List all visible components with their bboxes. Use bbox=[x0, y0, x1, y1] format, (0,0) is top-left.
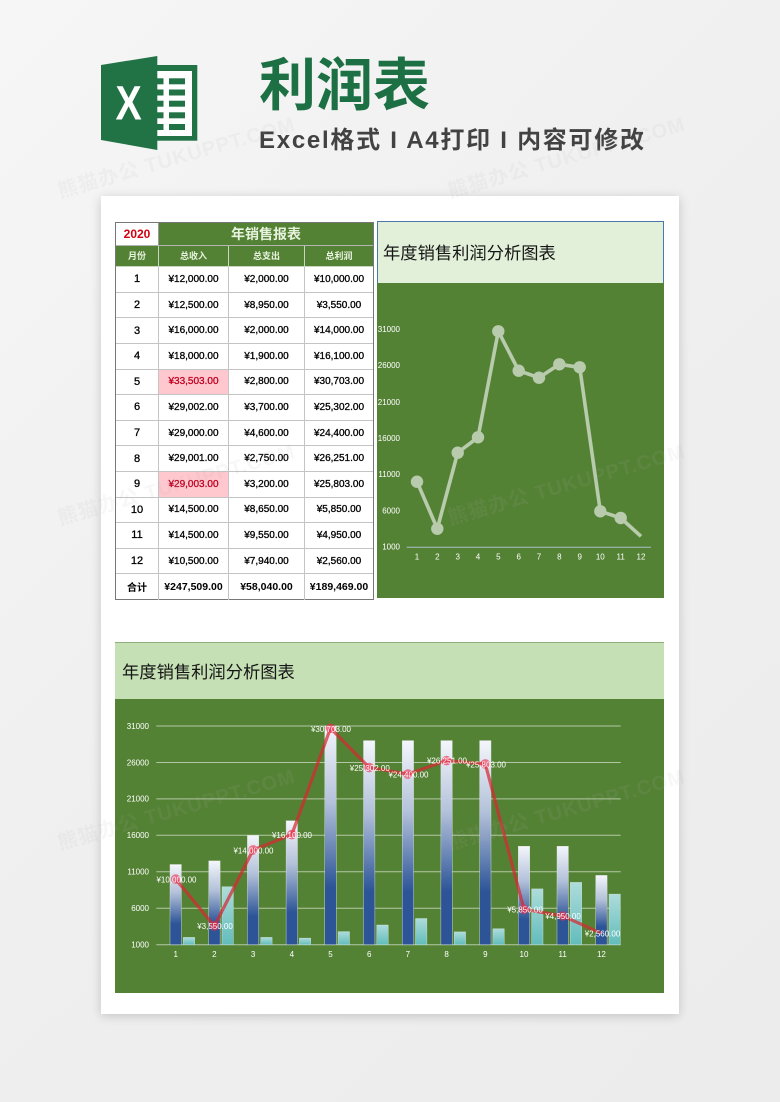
x axis labels: 8 bbox=[444, 950, 449, 959]
row: month 3 bbox=[116, 318, 373, 344]
row: month 3: 3 bbox=[134, 325, 140, 337]
row: month 9: ¥25,803.00 bbox=[314, 479, 364, 490]
row: month 10: ¥5,850.00 bbox=[317, 504, 361, 515]
watermarks: 熊猫办公 TUKUPPT.COM bbox=[55, 112, 298, 203]
x axis labels: 11 bbox=[617, 552, 625, 562]
y axis labels: 16000 bbox=[378, 434, 401, 443]
y axis labels bbox=[378, 325, 401, 552]
data labels: ¥2,560.00 bbox=[584, 930, 621, 938]
row: month 1 bbox=[116, 267, 373, 293]
x axis labels: 9 bbox=[483, 950, 488, 959]
row: month 7: 7 bbox=[134, 427, 140, 439]
x axis labels: 9 bbox=[577, 552, 582, 562]
data labels: ¥14,000.00 bbox=[232, 846, 274, 856]
x axis labels: 5 bbox=[328, 950, 333, 959]
y axis labels: 11000 bbox=[127, 868, 150, 876]
row: month 11: ¥4,950.00 bbox=[317, 530, 361, 541]
row: month 9: ¥29,003.00 bbox=[168, 479, 219, 490]
row: month 6: 6 bbox=[134, 401, 140, 413]
row: month 12: ¥10,500.00 bbox=[168, 556, 219, 567]
watermarks: 熊猫办公 TUKUPPT.COM bbox=[445, 112, 688, 203]
x axis labels: 2 bbox=[435, 552, 440, 562]
row: month 4 bbox=[116, 344, 373, 370]
x axis labels: 12 bbox=[637, 552, 646, 562]
row: month 7: ¥24,400.00 bbox=[314, 428, 364, 439]
x axis labels: 10 bbox=[520, 950, 529, 959]
row: totals: ¥189,469.00 bbox=[310, 581, 368, 593]
row: month 12 bbox=[116, 549, 373, 574]
x axis labels: 10 bbox=[596, 552, 605, 562]
table: annual sales report bbox=[115, 222, 374, 600]
x axis labels: 6 bbox=[516, 552, 521, 562]
row: month 11: ¥9,550.00 bbox=[244, 530, 289, 541]
row: month 8: ¥2,750.00 bbox=[244, 453, 289, 464]
row: month 8: 8 bbox=[134, 453, 140, 465]
y axis labels: 6000 bbox=[131, 904, 150, 913]
x axis labels: 12 bbox=[597, 950, 606, 959]
row: month 10: ¥14,500.00 bbox=[168, 504, 219, 515]
chart: lower combined bar and line chart bbox=[115, 699, 664, 993]
icon: Excel logo bbox=[101, 56, 197, 150]
panel: upper chart title: 年度销售利润分析图表 bbox=[383, 243, 556, 263]
row: month 1: ¥2,000.00 bbox=[244, 274, 289, 285]
title: 利润表 bbox=[259, 54, 430, 118]
row: month 10 bbox=[116, 498, 373, 523]
data labels: ¥26,251.00 bbox=[426, 756, 468, 766]
row: totals: ¥247,509.00 bbox=[164, 581, 223, 593]
row: month 4: ¥1,900.00 bbox=[244, 351, 289, 362]
data labels: ¥25,803.00 bbox=[465, 760, 507, 769]
row: month 12: ¥2,560.00 bbox=[317, 556, 361, 567]
row: month 1: ¥10,000.00 bbox=[314, 274, 364, 285]
x axis labels: 7 bbox=[537, 552, 542, 562]
row: month 2: 2 bbox=[134, 299, 140, 311]
row: month 3: ¥14,000.00 bbox=[314, 325, 364, 336]
y axis labels: 26000 bbox=[127, 758, 150, 767]
table header row: 总支出 bbox=[253, 251, 280, 261]
y axis labels: 21000 bbox=[378, 398, 401, 407]
row: month 5: ¥33,503.00 bbox=[168, 376, 219, 387]
row: month 9: 9 bbox=[134, 478, 140, 490]
row: month 10: ¥8,650.00 bbox=[244, 504, 289, 515]
y axis labels bbox=[127, 722, 150, 950]
y axis labels: 1000 bbox=[382, 542, 401, 552]
y axis labels: 1000 bbox=[131, 940, 150, 950]
row: month 3: ¥2,000.00 bbox=[244, 325, 289, 336]
data labels: ¥4,950.00 bbox=[544, 912, 581, 921]
row: month 9: ¥3,200.00 bbox=[244, 479, 289, 490]
chart: upper profit line chart bbox=[377, 283, 664, 598]
row: month 2: ¥8,950.00 bbox=[244, 300, 289, 311]
row: month 5: ¥30,703.00 bbox=[314, 376, 364, 387]
y axis labels: 6000 bbox=[382, 506, 401, 516]
x axis labels: 6 bbox=[367, 950, 372, 959]
row: month 4: 4 bbox=[134, 350, 140, 362]
table title row: 年销售报表 bbox=[231, 226, 301, 242]
y axis labels: 21000 bbox=[127, 795, 150, 804]
data labels bbox=[155, 725, 621, 938]
row: month 11 bbox=[116, 523, 373, 549]
row: month 12: 12 bbox=[131, 555, 143, 567]
row: month 6: ¥25,302.00 bbox=[314, 402, 364, 413]
table header row: 总利润 bbox=[325, 251, 352, 261]
table header row bbox=[116, 246, 373, 267]
x axis labels: 7 bbox=[406, 950, 411, 959]
icon: Excel logo: X bbox=[116, 77, 142, 130]
bars: total expense bbox=[183, 882, 620, 945]
row: month 10: 10 bbox=[131, 504, 143, 516]
table header row: 月份 bbox=[128, 251, 146, 261]
y axis labels: 31000 bbox=[127, 722, 150, 731]
row: month 1: ¥12,000.00 bbox=[168, 274, 219, 285]
panel: white document card bbox=[101, 196, 679, 1014]
row: month 3: ¥16,000.00 bbox=[168, 325, 219, 336]
y axis labels: 31000 bbox=[378, 325, 401, 334]
row: month 9 bbox=[116, 472, 373, 498]
subtitle: Excel格式 I A4打印 I 内容可修改 bbox=[259, 127, 644, 154]
row: month 5 bbox=[116, 370, 373, 395]
line series: total profit bbox=[171, 723, 601, 933]
data labels: ¥24,400.00 bbox=[387, 770, 429, 779]
data labels: ¥3,550.00 bbox=[196, 922, 233, 931]
panel: lower chart title: 年度销售利润分析图表 bbox=[122, 662, 295, 682]
row: month 11: 11 bbox=[131, 529, 143, 541]
y axis labels: 16000 bbox=[127, 831, 150, 840]
row: month 4: ¥16,100.00 bbox=[314, 351, 364, 362]
x axis labels: 3 bbox=[455, 552, 460, 562]
x axis labels: 1 bbox=[415, 552, 420, 562]
row: month 8 bbox=[116, 446, 373, 472]
row: month 7: ¥4,600.00 bbox=[244, 428, 289, 439]
data labels: ¥16,100.00 bbox=[271, 831, 313, 840]
data labels: ¥5,850.00 bbox=[506, 905, 543, 914]
row: month 11: ¥14,500.00 bbox=[168, 530, 219, 541]
watermarks: 熊猫办公 TUKUPPT.COM bbox=[55, 764, 298, 855]
bars: total income bbox=[170, 726, 607, 945]
line series: profit bbox=[411, 325, 641, 536]
x axis labels: 3 bbox=[251, 950, 256, 959]
row: month 8: ¥26,251.00 bbox=[314, 453, 364, 464]
row: month 6: ¥3,700.00 bbox=[244, 402, 289, 413]
row: month 2: ¥3,550.00 bbox=[317, 300, 361, 311]
row: month 7 bbox=[116, 421, 373, 446]
x axis labels: 4 bbox=[476, 552, 481, 562]
row: month 4: ¥18,000.00 bbox=[168, 351, 219, 362]
row: month 8: ¥29,001.00 bbox=[168, 453, 219, 464]
row: month 2: ¥12,500.00 bbox=[168, 300, 219, 311]
table title row: 2020 bbox=[124, 227, 150, 241]
row: month 2 bbox=[116, 293, 373, 318]
x axis labels: 4 bbox=[290, 950, 295, 959]
header: logo, title and subtitle bbox=[101, 54, 644, 154]
row: month 1: 1 bbox=[134, 273, 140, 285]
row: month 7: ¥29,000.00 bbox=[168, 428, 219, 439]
data labels: ¥10,000.00 bbox=[155, 876, 197, 884]
row: totals: 合计 bbox=[127, 583, 147, 594]
x axis labels bbox=[415, 552, 646, 562]
watermarks: 熊猫办公 TUKUPPT.COM bbox=[55, 439, 298, 530]
row: totals bbox=[127, 574, 368, 600]
x axis labels bbox=[173, 950, 606, 959]
y axis labels: 11000 bbox=[378, 470, 401, 479]
x axis labels: 5 bbox=[496, 552, 501, 562]
x axis labels: 1 bbox=[173, 950, 178, 959]
row: totals: ¥58,040.00 bbox=[240, 581, 293, 593]
data labels: ¥30,703.00 bbox=[310, 725, 352, 734]
table title row bbox=[116, 223, 373, 246]
x axis labels: 2 bbox=[212, 950, 217, 959]
x axis labels: 8 bbox=[557, 552, 562, 562]
row: month 6 bbox=[116, 395, 373, 421]
row: month 5: 5 bbox=[134, 376, 140, 388]
y axis labels: 26000 bbox=[378, 361, 401, 370]
row: month 5: ¥2,800.00 bbox=[244, 376, 289, 387]
row: month 6: ¥29,002.00 bbox=[168, 402, 219, 413]
panel: lower chart title bbox=[115, 642, 664, 699]
data labels: ¥25,302.00 bbox=[349, 764, 390, 773]
watermarks: 熊猫办公 TUKUPPT.COM bbox=[445, 764, 688, 855]
panel: upper chart title bbox=[377, 221, 664, 284]
table header row: 总收入 bbox=[180, 251, 207, 261]
x axis labels: 11 bbox=[559, 950, 567, 959]
watermarks: 熊猫办公 TUKUPPT.COM bbox=[445, 439, 688, 530]
row: month 12: ¥7,940.00 bbox=[244, 556, 289, 567]
